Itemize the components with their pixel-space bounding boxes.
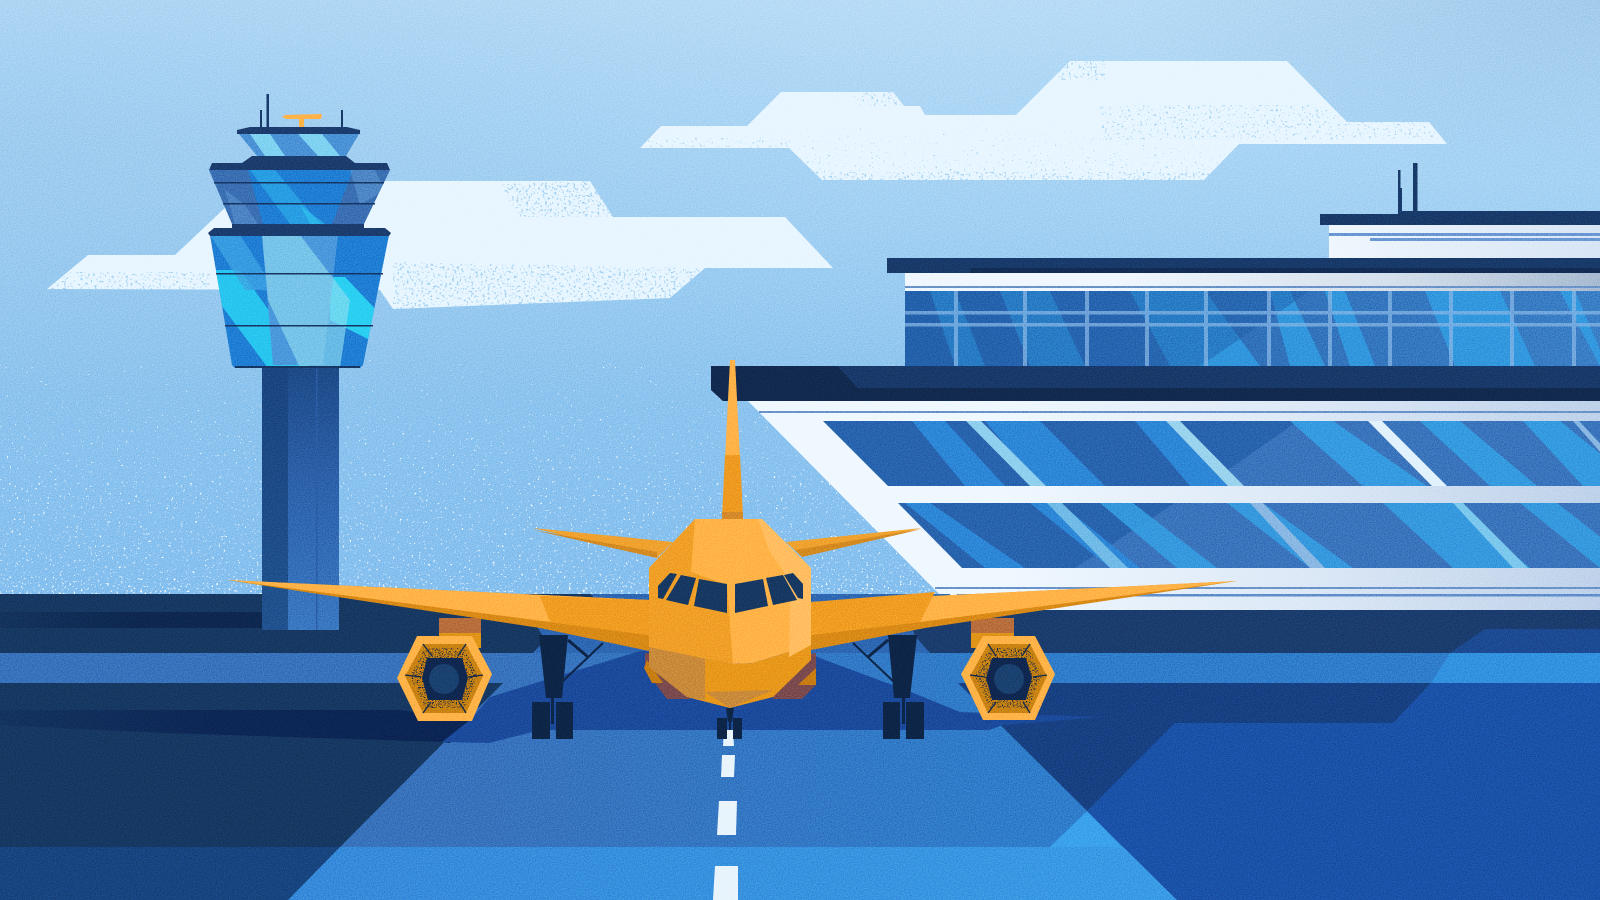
plane shadow <box>442 651 1101 743</box>
maroon under-body panels <box>644 653 816 699</box>
lower cab <box>208 224 391 368</box>
cockpit windows <box>658 573 803 613</box>
white strip above glass <box>905 273 1600 291</box>
right dark ground <box>958 683 1600 900</box>
left main gear <box>532 635 603 739</box>
left dark band <box>0 594 595 653</box>
white facade <box>748 401 1600 610</box>
terminal upper storey <box>887 163 1600 366</box>
roof slab <box>711 366 1600 401</box>
left engine pylon <box>439 618 481 648</box>
top roof block <box>1320 211 1600 225</box>
runway surface <box>0 653 1600 900</box>
vertical tail <box>722 360 743 520</box>
left tailplane <box>533 528 673 558</box>
tower shaft <box>262 368 339 630</box>
cloud: upper right <box>640 61 1450 180</box>
window row 2 <box>890 503 1600 568</box>
radar <box>282 114 322 127</box>
second roof slab <box>887 258 1600 273</box>
engine shadow on left ground <box>0 710 470 743</box>
antennas on terminal roof <box>1398 163 1418 213</box>
apron behind plane <box>500 594 950 664</box>
airplane <box>227 360 1237 739</box>
left dark ground <box>0 683 503 847</box>
left dark stripe <box>0 612 265 628</box>
right engine <box>961 636 1055 720</box>
right dark band <box>905 610 1600 653</box>
upper fuselage <box>649 519 811 664</box>
right tailplane <box>786 528 922 557</box>
right engine pylon <box>971 618 1014 648</box>
nose gear <box>717 708 742 739</box>
middle cab <box>209 156 390 224</box>
right main gear <box>853 635 924 739</box>
antennas <box>260 94 343 128</box>
cloud: behind tower <box>47 181 833 309</box>
top white block <box>1329 225 1600 258</box>
lower fuselage <box>649 645 811 708</box>
terminal lower storey <box>711 366 1600 610</box>
left engine <box>397 636 492 721</box>
ground and apron <box>0 594 1600 900</box>
right wing <box>811 581 1237 650</box>
top cab <box>237 127 360 156</box>
left wing <box>227 580 649 651</box>
window row 1 <box>820 421 1600 486</box>
upper glass <box>905 291 1600 366</box>
sky background <box>0 0 1600 610</box>
control tower <box>208 94 391 630</box>
runway centre line <box>713 730 738 900</box>
